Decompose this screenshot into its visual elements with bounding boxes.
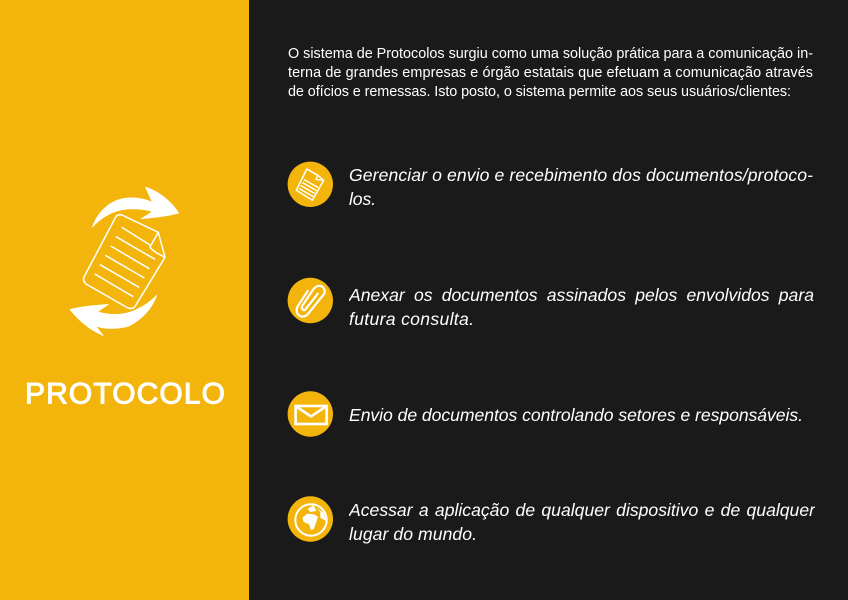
icon: document with circular arrows bbox=[69, 187, 179, 336]
text block: introduction: terna de grandes empresas e órgão estatais que efetuam a comunicação através bbox=[288, 65, 813, 81]
text: access anywhere bbox=[349, 498, 815, 544]
icon: envelope badge bbox=[288, 391, 333, 437]
text: manage documents bbox=[349, 165, 813, 209]
text: attach documents bbox=[349, 283, 814, 329]
icon: document badge bbox=[288, 162, 333, 207]
text: manage documents: Gerenciar o envio e recebimento dos documentos/protoco- bbox=[349, 165, 813, 185]
text: access anywhere: lugar do mundo. bbox=[349, 524, 477, 544]
text block: introduction: de ofícios e remessas. Isto posto, o sistema permite aos seus usuários/clientes: bbox=[288, 84, 791, 100]
icon: paperclip badge bbox=[288, 278, 333, 323]
text block: introduction: O sistema de Protocolos surgiu como uma solução prática para a comunicação in- bbox=[288, 46, 813, 62]
panel: yellow sidebar bbox=[0, 0, 249, 600]
text: attach documents: futura consulta. bbox=[349, 309, 474, 329]
heading: PROTOCOLO: PROTOCOLO bbox=[25, 378, 225, 410]
icon: globe badge bbox=[288, 496, 333, 542]
text: manage documents: los. bbox=[349, 189, 376, 209]
text: access anywhere: Acessar a aplicação de qualquer dispositivo e de qualquer bbox=[349, 500, 815, 520]
text: attach documents: Anexar os documentos assinados pelos envolvidos para bbox=[349, 285, 814, 305]
text: send documents: Envio de documentos controlando setores e responsáveis. bbox=[349, 405, 803, 425]
text block: introduction bbox=[288, 46, 813, 100]
